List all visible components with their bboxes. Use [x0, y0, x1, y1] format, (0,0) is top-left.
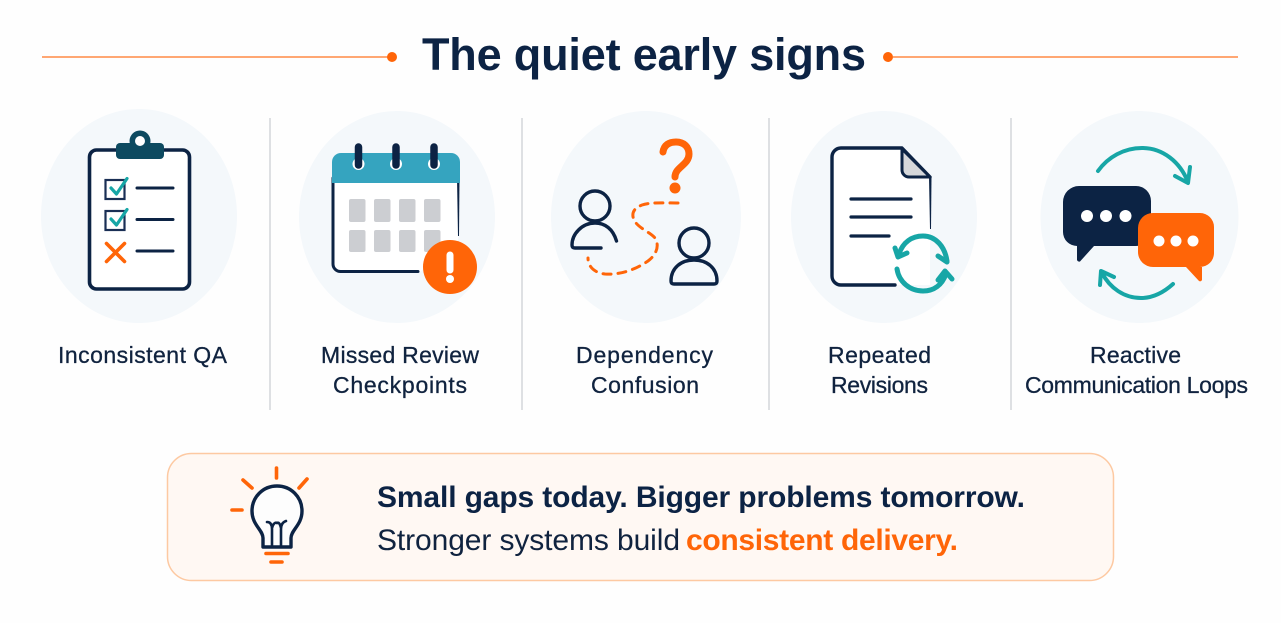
icon: two people with dashed path — [572, 142, 717, 284]
panel: missed review checkpoints — [299, 111, 495, 398]
callout text — [377, 481, 1025, 557]
label — [828, 342, 931, 398]
callout text: Small gaps today. Bigger problems tomorrow. — [377, 481, 1025, 514]
callout text: consistent delivery. — [686, 524, 958, 557]
label: Dependency — [576, 342, 714, 368]
panel: dependency confusion — [551, 111, 741, 398]
label: Repeated — [828, 342, 931, 368]
label: Communication Loops — [1025, 372, 1248, 398]
label: Checkpoints — [333, 372, 467, 398]
icon: calendar — [332, 147, 477, 294]
panel: inconsistent QA — [41, 109, 237, 368]
label — [576, 342, 714, 398]
callout — [168, 454, 1114, 580]
title: The quiet early signs — [422, 29, 866, 80]
label — [1025, 342, 1248, 398]
title — [42, 29, 1238, 80]
label: Reactive — [1090, 342, 1181, 368]
label: Revisions — [831, 372, 928, 398]
label: Inconsistent QA — [58, 342, 228, 368]
label: Confusion — [591, 372, 699, 398]
label — [321, 342, 479, 398]
icon: chat bubbles with loop arrows — [1063, 148, 1214, 298]
icon: light bulb — [232, 468, 307, 562]
icon: document with sync arrows — [832, 148, 952, 291]
label: Missed Review — [321, 342, 479, 368]
panel: repeated revisions — [791, 111, 977, 398]
icon: clipboard — [90, 130, 190, 289]
callout text: Stronger systems build — [377, 524, 680, 557]
panel: reactive communication loops — [1025, 111, 1248, 398]
